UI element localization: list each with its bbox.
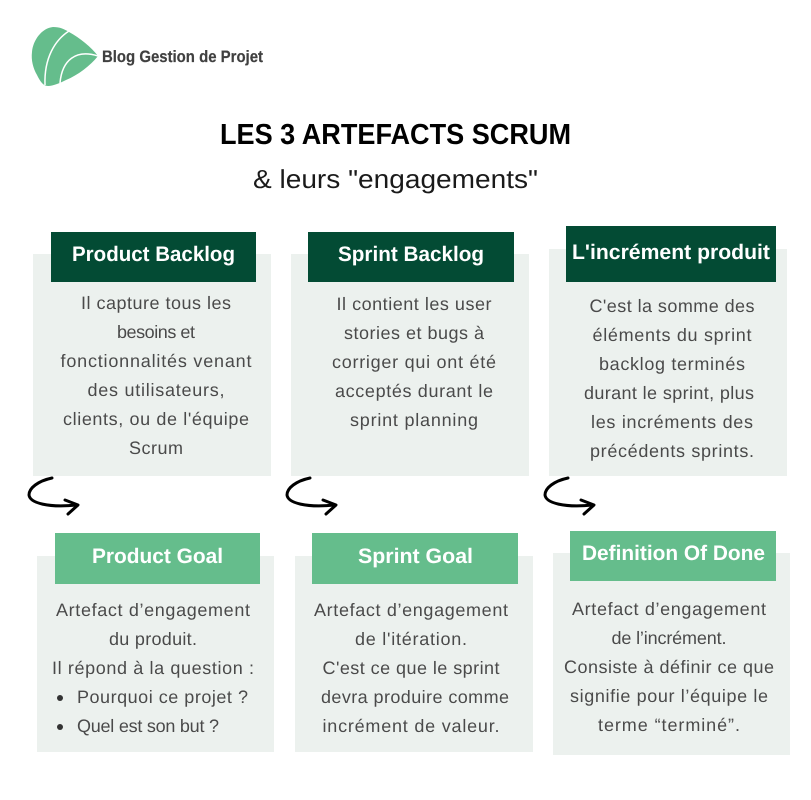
text block: Sprint Goal description: C'est ce que le sprint bbox=[322, 658, 500, 678]
text block: increment description: backlog terminés bbox=[599, 354, 745, 374]
text block: Product Backlog description: besoins et bbox=[117, 322, 195, 342]
text block: Sprint Goal description: Artefact d’engagement bbox=[314, 600, 508, 620]
text block: Product Backlog description: Il capture tous les bbox=[81, 293, 231, 313]
text block: Definition Of Done description: de l’incrément. bbox=[612, 628, 726, 648]
text block: Product Goal description bbox=[52, 600, 254, 736]
text block: Definition Of Done description: terme “terminé”. bbox=[598, 715, 740, 735]
heading: Product Backlog bbox=[51, 232, 256, 282]
panel: Sprint Goal bbox=[295, 533, 533, 752]
text block: increment description: C'est la somme des bbox=[590, 296, 754, 316]
text block: Sprint Backlog description: acceptés durant le bbox=[335, 381, 493, 401]
logo text: Blog Gestion de Projet bbox=[102, 48, 263, 66]
text block: Sprint Goal description: de l'itération. bbox=[355, 629, 467, 649]
arrow: Sprint Backlog to Sprint Goal bbox=[287, 478, 336, 514]
text block: Product Goal description: du produit. bbox=[109, 629, 197, 649]
text block: Sprint Goal description bbox=[314, 600, 509, 736]
bullet list bbox=[57, 687, 248, 736]
heading: Sprint Goal bbox=[312, 533, 518, 584]
text block: increment description: les incréments des bbox=[591, 412, 753, 432]
heading: Definition Of Done bbox=[570, 531, 776, 581]
arrow: increment to Definition Of Done bbox=[545, 478, 594, 514]
text block: Definition Of Done description: signifie pour l’équipe le bbox=[570, 686, 768, 706]
panel: Definition Of Done bbox=[553, 531, 790, 755]
text block: Definition Of Done description: Consiste à définir ce que bbox=[564, 657, 774, 677]
panel: Product Backlog bbox=[33, 232, 271, 476]
text block: Sprint Backlog description bbox=[332, 294, 496, 430]
heading: L'incrément produit: L'incrément produit bbox=[572, 241, 770, 264]
panel: Product Goal bbox=[37, 533, 274, 752]
text block: increment description: durant le sprint, plus bbox=[584, 383, 754, 403]
arrow: Product Backlog to Product Goal bbox=[29, 478, 78, 514]
heading: Product Goal bbox=[55, 533, 260, 584]
heading: Product Backlog: Product Backlog bbox=[72, 243, 235, 266]
text block: Product Goal description: Il répond à la question : bbox=[52, 658, 254, 678]
text block: Sprint Goal description: devra produire comme bbox=[321, 687, 509, 707]
text block: increment description: éléments du sprint bbox=[592, 325, 752, 345]
text block: Product Backlog description: clients, ou de l'équipe bbox=[63, 409, 249, 429]
text block: increment description: précédents sprints. bbox=[590, 441, 754, 461]
bullet list: Pourquoi ce projet ? bbox=[77, 687, 248, 707]
text block: Product Goal description: Artefact d’engagement bbox=[56, 600, 250, 620]
subtitle: & leurs "engagements" bbox=[253, 164, 538, 194]
icon: green leaf logo bbox=[32, 27, 98, 86]
text block: Definition Of Done description bbox=[564, 599, 774, 735]
heading: Sprint Goal: Sprint Goal bbox=[358, 545, 473, 568]
panel: Sprint Backlog bbox=[291, 232, 529, 476]
title: LES 3 ARTEFACTS SCRUM bbox=[220, 119, 571, 151]
heading: Definition Of Done: Definition Of Done bbox=[582, 542, 765, 565]
logo: Blog Gestion de Projet bbox=[32, 27, 263, 86]
text block: increment description bbox=[584, 296, 754, 461]
text block: Product Backlog description: fonctionnalités venant bbox=[60, 351, 252, 371]
text block: Sprint Backlog description: stories et bugs à bbox=[344, 323, 485, 343]
text block: Product Backlog description: des utilisateurs, bbox=[88, 380, 224, 400]
text block: Product Backlog description: Scrum bbox=[129, 438, 183, 458]
text block: Definition Of Done description: Artefact d’engagement bbox=[572, 599, 766, 619]
text block: Sprint Backlog description: corriger qui ont été bbox=[332, 352, 496, 372]
heading: L'incrément produit bbox=[566, 226, 776, 282]
heading: Sprint Backlog: Sprint Backlog bbox=[338, 243, 484, 266]
text block: Product Backlog description bbox=[60, 293, 252, 458]
heading: Product Goal: Product Goal bbox=[92, 545, 223, 568]
text block: Sprint Goal description: incrément de valeur. bbox=[322, 716, 500, 736]
heading: Sprint Backlog bbox=[308, 232, 514, 282]
text block: Sprint Backlog description: Il contient les user bbox=[336, 294, 492, 314]
bullet list: Quel est son but ? bbox=[77, 716, 219, 736]
panel: L'incrément produit bbox=[549, 226, 787, 476]
text block: Sprint Backlog description: sprint planning bbox=[350, 410, 478, 430]
